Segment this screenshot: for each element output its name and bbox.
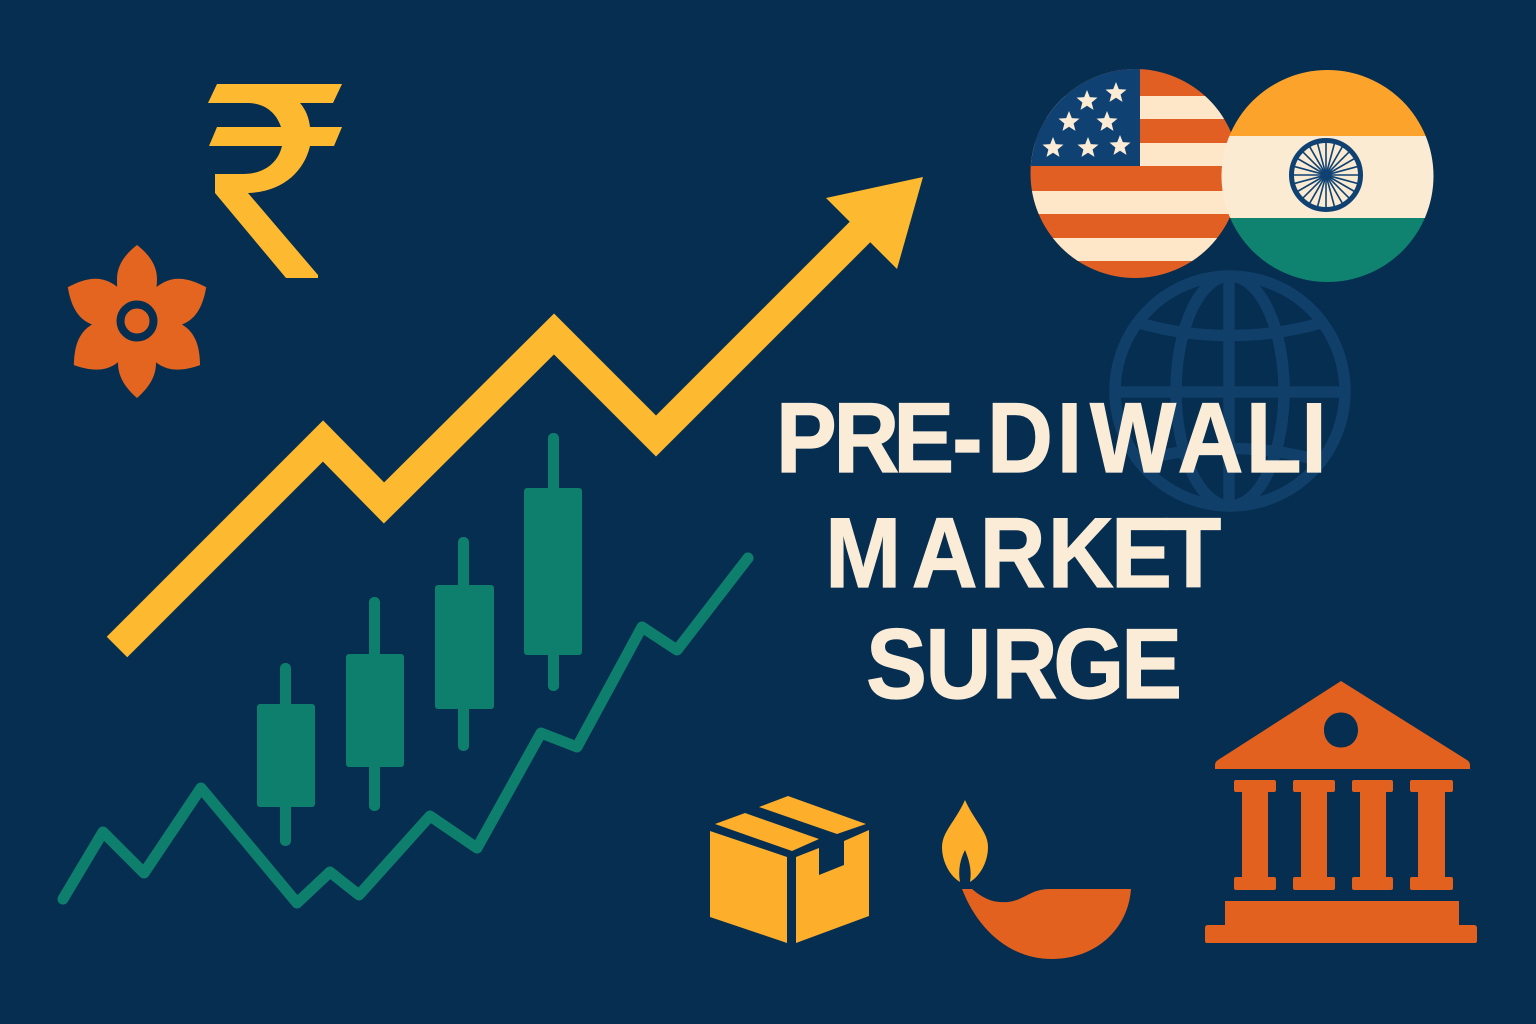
chart: green price line xyxy=(63,558,748,903)
title xyxy=(776,384,1327,720)
candle 1 xyxy=(257,663,315,846)
icon: United States flag circle xyxy=(1030,68,1240,280)
icon: rupee symbol xyxy=(208,84,342,278)
candle 2 xyxy=(346,597,404,811)
icon: diya lamp xyxy=(942,800,1131,959)
column 1 xyxy=(1234,780,1276,890)
icon: bank building xyxy=(1205,681,1477,943)
Ashoka chakra xyxy=(1292,140,1360,210)
icon: faint globe xyxy=(1115,276,1345,506)
icon: India flag circle xyxy=(1220,68,1436,284)
icon: cardboard box xyxy=(710,796,869,943)
title: MARKET xyxy=(825,499,1221,609)
stars xyxy=(1042,82,1130,157)
arrow: yellow rising trend xyxy=(117,177,923,647)
title: SURGE xyxy=(866,610,1182,720)
column 3 xyxy=(1352,780,1393,890)
candle 4 xyxy=(524,433,582,691)
chart: green candlesticks xyxy=(257,433,582,846)
candle 3 xyxy=(435,537,494,751)
icon: orange flower xyxy=(58,245,216,398)
column 4 xyxy=(1410,780,1453,890)
steps xyxy=(1205,901,1477,943)
title: PRE-DIWALI xyxy=(776,384,1327,494)
column 2 xyxy=(1293,780,1335,890)
